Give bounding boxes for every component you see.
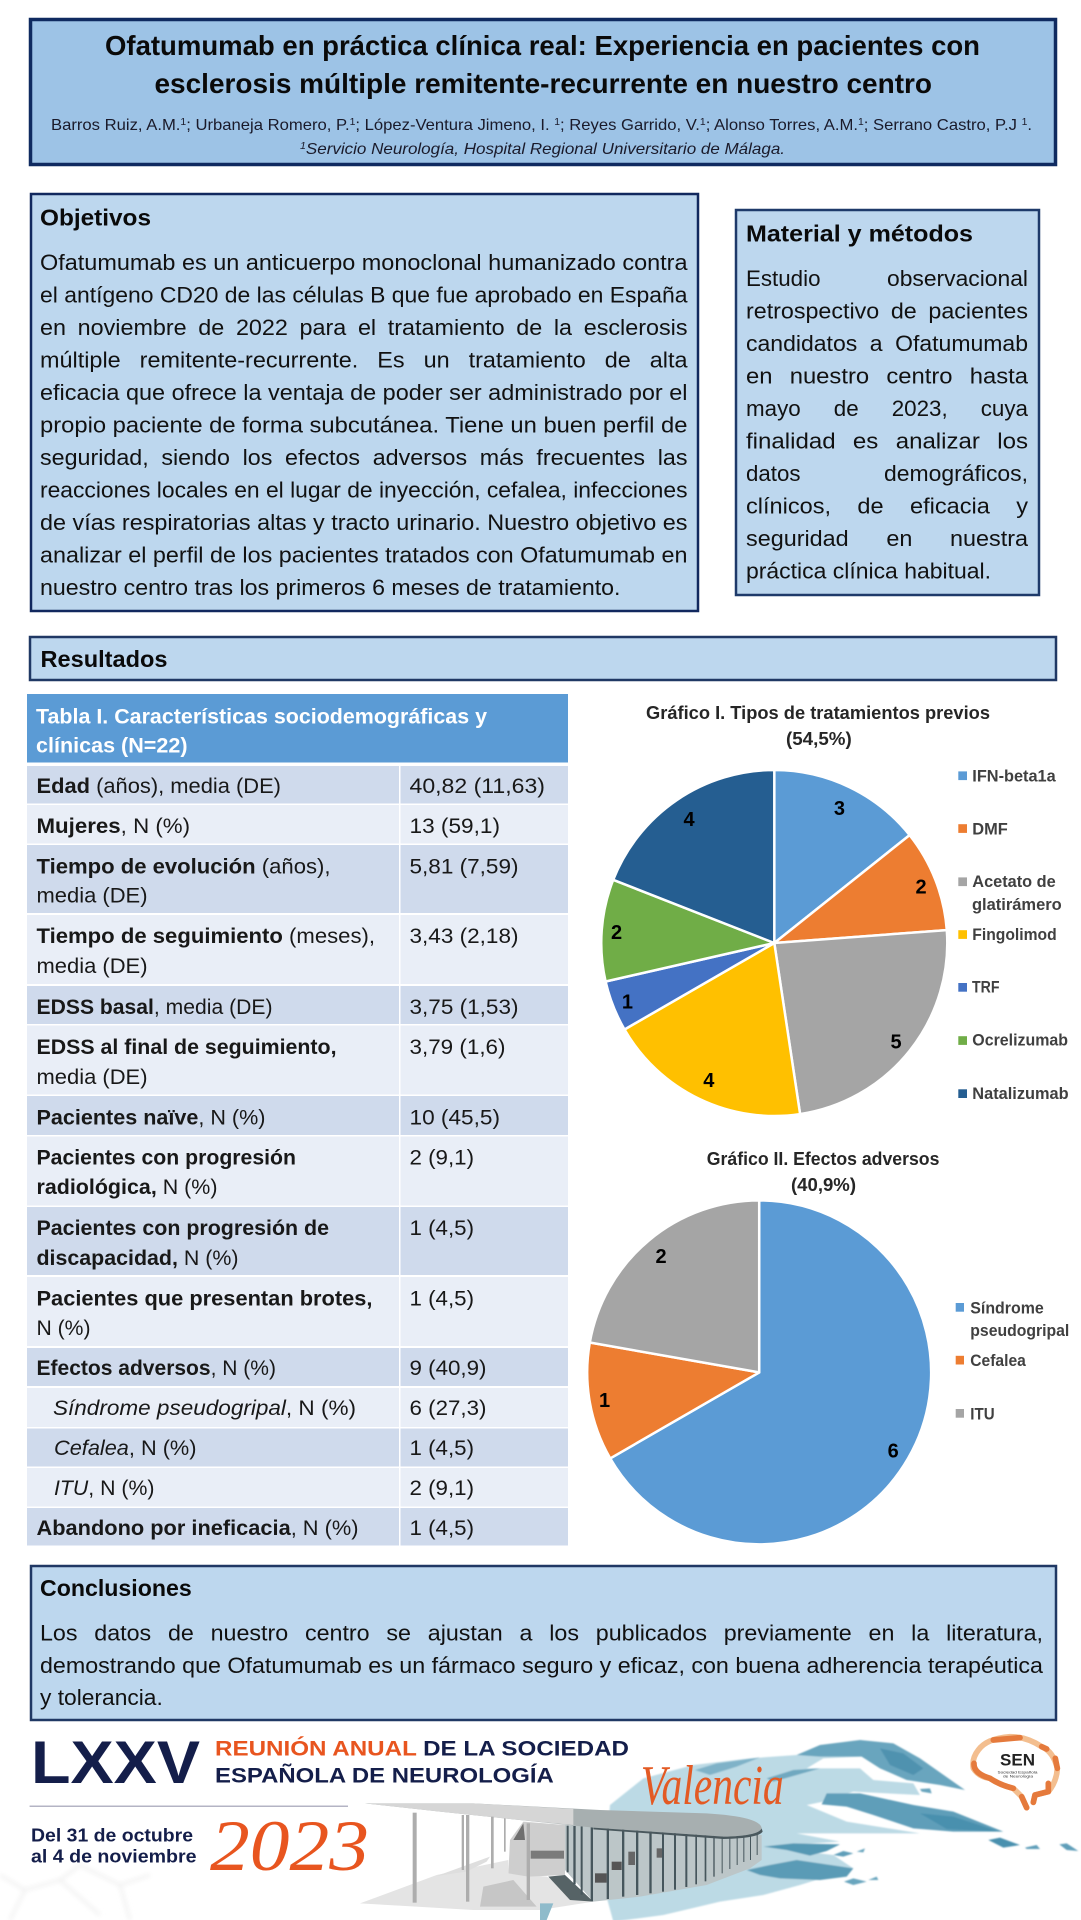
authors: 1 <box>350 117 356 128</box>
objetivos body text <box>40 250 688 600</box>
event dates: al 4 de noviembre <box>31 1847 196 1867</box>
table row labels: Pacientes que presentan brotes, <box>36 1286 372 1310</box>
table row labels: Efectos adversos, N (%) <box>36 1356 276 1380</box>
table row labels: N (%) <box>36 1316 90 1340</box>
pie value labels: 2 <box>655 1246 667 1268</box>
illustration: congress building <box>360 1803 763 1920</box>
logo: SEN <box>973 1737 1057 1808</box>
pie value labels: 2 <box>611 922 622 944</box>
table row values: 3,43 (2,18) <box>410 924 518 948</box>
material y métodos body text: clínicos, de eficacia y <box>746 494 1029 518</box>
legend <box>958 767 1069 1103</box>
chart title: (54,5%) <box>786 728 852 749</box>
legend: Cefalea <box>970 1351 1026 1370</box>
logo: SEN: de Neurología <box>1003 1773 1034 1778</box>
conclusiones body text: demostrando que Ofatumumab es un fármaco seguro y eficaz, con buena adherencia terapéutica <box>40 1653 1043 1678</box>
title: esclerosis múltiple remitente-recurrente en nuestro centro <box>154 68 932 99</box>
legend: IFN-beta1a <box>972 767 1056 786</box>
table row labels: ITU, N (%) <box>54 1476 154 1500</box>
objetivos body text: reacciones locales en el lugar de inyección, cefalea, infecciones <box>40 478 687 502</box>
event dates: Del 31 de octubre <box>31 1826 193 1846</box>
table row labels: media (DE) <box>36 1065 148 1089</box>
event dates <box>31 1826 196 1867</box>
legend: Natalizumab <box>972 1084 1069 1103</box>
table row values: 1 (4,5) <box>410 1516 474 1540</box>
table row values: 1 (4,5) <box>410 1436 474 1460</box>
table row values: 40,82 (11,63) <box>410 774 545 798</box>
objetivos body text: de vías respiratorias altas y tracto urinario. Nuestro objetivo es <box>40 510 688 535</box>
material y métodos body text: candidatos a Ofatumumab <box>746 331 1028 356</box>
table row values: 9 (40,9) <box>410 1356 486 1380</box>
table row labels: EDSS al final de seguimiento, <box>36 1035 336 1059</box>
panel: objetivos <box>31 194 698 611</box>
material y métodos body text: práctica clínica habitual. <box>746 558 991 584</box>
legend <box>956 1298 1069 1423</box>
conclusiones body text: y tolerancia. <box>40 1685 163 1710</box>
event name: ESPAÑOLA DE NEUROLOGÍA <box>215 1763 554 1788</box>
authors: ; Serrano Castro, P.J <box>864 117 1022 134</box>
table header: clínicas (N=22) <box>36 734 188 758</box>
authors: 1 <box>700 117 706 128</box>
title <box>105 30 980 99</box>
objetivos body text: analizar el perfil de los pacientes tratados con Ofatumumab en <box>40 542 688 568</box>
objetivos body text: múltiple remitente-recurrente. Es un tratamiento de alta <box>40 348 688 372</box>
table row labels: Cefalea, N (%) <box>54 1436 196 1460</box>
table row values: 3,75 (1,53) <box>410 995 518 1019</box>
title: Ofatumumab en práctica clínica real: Experiencia en pacientes con <box>105 30 980 61</box>
panel: title header <box>30 20 1056 164</box>
chart title <box>707 1148 939 1195</box>
objetivos body text: seguridad, siendo los efectos adversos más frecuentes las <box>40 445 687 470</box>
authors: ; Alonso Torres, A.M. <box>706 117 858 134</box>
authors: 1 <box>1022 117 1028 128</box>
authors: 1 <box>858 117 864 128</box>
legend: Fingolimod <box>972 925 1057 944</box>
table row labels: media (DE) <box>36 954 148 978</box>
pie value labels: 6 <box>888 1441 899 1463</box>
table: características sociodemográficas <box>27 694 568 1546</box>
conclusiones body text <box>40 1620 1043 1710</box>
watermark: faint branches <box>0 1865 150 1920</box>
objetivos body text: el antígeno CD20 de las células B que fue aprobado en España <box>40 282 688 308</box>
legend: Ocrelizumab <box>972 1030 1068 1050</box>
table row labels: Tiempo de seguimiento (meses), <box>36 924 375 948</box>
table row values: 1 (4,5) <box>410 1286 474 1310</box>
table header: Tabla I. Características sociodemográficas y <box>36 704 487 728</box>
material y métodos body text: Estudio <box>746 266 820 291</box>
table row values: 5,81 (7,59) <box>410 854 518 878</box>
material y métodos body text: mayo de 2023, cuya <box>746 396 1028 421</box>
table rows background <box>27 766 568 1546</box>
objetivos body text: propio paciente de forma subcutánea. Tiene un buen perfil de <box>40 412 688 438</box>
authors: 1 <box>180 117 187 128</box>
table row labels: Mujeres, N (%) <box>36 814 190 838</box>
table row labels: Pacientes naïve, N (%) <box>36 1106 266 1130</box>
legend: Síndrome <box>970 1298 1044 1317</box>
chart title: Gráfico I. Tipos de tratamientos previos <box>646 702 990 723</box>
material y métodos body text: datos <box>746 461 800 486</box>
table row labels: Tiempo de evolución (años), <box>36 854 330 878</box>
legend: glatirámero <box>972 895 1062 914</box>
event number: LXXV <box>31 1729 200 1796</box>
table row values: 2 (9,1) <box>410 1146 474 1170</box>
table row values: 3,79 (1,6) <box>410 1035 506 1059</box>
affiliation: Servicio Neurología, Hospital Regional Universitario de Málaga. <box>306 141 785 158</box>
objetivos body text: eficacia que ofrece la ventaja de poder ser administrado por el <box>40 380 688 405</box>
heading: conclusiones: Conclusiones <box>40 1575 192 1601</box>
table row labels: Pacientes con progresión de <box>36 1216 329 1240</box>
banner: congress footer <box>0 1729 1078 1920</box>
authors: ; Reyes Garrido, V. <box>560 117 700 134</box>
legend: TRF <box>972 978 1000 997</box>
authors: ; López-Ventura Jimeno, I. <box>355 117 554 134</box>
logo: SEN: SEN <box>1000 1751 1035 1770</box>
table row labels: Edad (años), media (DE) <box>36 774 281 798</box>
pie value labels <box>611 798 927 1092</box>
chart title: (40,9%) <box>791 1174 856 1195</box>
chart: gráfico II efectos adversos <box>587 1148 1069 1544</box>
authors: . <box>1027 117 1032 134</box>
table row labels: Abandono por ineficacia, N (%) <box>36 1516 358 1540</box>
authors: Barros Ruiz, A.M. <box>51 117 175 134</box>
legend: Acetato de <box>972 872 1056 891</box>
table row labels: EDSS basal, media (DE) <box>36 995 272 1019</box>
objetivos body text: nuestro centro tras los primeros 6 meses de tratamiento. <box>40 575 620 600</box>
pie value labels: 4 <box>683 809 695 831</box>
objetivos body text: Ofatumumab es un anticuerpo monoclonal humanizado contra <box>40 250 688 275</box>
chart: gráfico I tipos de tratamientos previos <box>601 702 1069 1116</box>
pie value labels: 1 <box>599 1390 610 1412</box>
legend: DMF <box>972 819 1008 838</box>
city: Valencia <box>641 1755 784 1817</box>
table row labels <box>36 774 375 1540</box>
table row values: 10 (45,5) <box>410 1106 500 1130</box>
pie value labels <box>599 1246 899 1463</box>
pie value labels: 4 <box>703 1070 715 1092</box>
watercolour wash <box>603 1740 1078 1920</box>
conclusiones body text: Los datos de nuestro centro se ajustan a los publicados previamente en la literatura, <box>40 1620 1043 1646</box>
table row labels: discapacidad, N (%) <box>36 1246 238 1270</box>
pie value labels: 1 <box>622 992 633 1014</box>
table row values: 13 (59,1) <box>410 814 500 838</box>
logo: SEN: Sociedad Española <box>998 1769 1038 1774</box>
pie value labels: 3 <box>834 798 845 820</box>
pie value labels: 2 <box>915 876 927 898</box>
table row values <box>410 774 545 1540</box>
material y métodos body text: retrospectivo de pacientes <box>746 298 1028 324</box>
panel: resultados heading bar <box>30 637 1056 680</box>
authors: 1 <box>554 117 560 128</box>
legend: ITU <box>970 1404 995 1423</box>
affiliation: 1 <box>300 141 306 152</box>
material y métodos body text: finalidad es analizar los <box>746 428 1028 454</box>
objetivos body text: en noviembre de 2022 para el tratamiento de la esclerosis <box>40 315 688 340</box>
panel: material y métodos <box>736 210 1039 595</box>
material y métodos body text: observacional <box>887 266 1028 291</box>
material y métodos body text: demográficos, <box>884 461 1028 486</box>
table row values: 1 (4,5) <box>410 1216 474 1240</box>
material y métodos body text: en nuestro centro hasta <box>746 364 1029 388</box>
chart title <box>646 702 990 749</box>
year: 2023 <box>210 1806 369 1886</box>
legend: pseudogripal <box>970 1321 1069 1340</box>
chart title: Gráfico II. Efectos adversos <box>707 1148 939 1169</box>
table row values: 6 (27,3) <box>410 1396 486 1420</box>
table row labels: media (DE) <box>36 884 148 908</box>
pie value labels: 5 <box>890 1032 902 1054</box>
pie slices <box>601 770 947 1116</box>
table header <box>27 694 568 762</box>
material y métodos body text: seguridad en nuestra <box>746 526 1028 551</box>
pie slices <box>587 1200 931 1544</box>
table row labels: Síndrome pseudogripal , N (%) <box>53 1396 356 1420</box>
table row values: 2 (9,1) <box>410 1476 474 1500</box>
event name: REUNIÓN ANUAL DE LA SOCIEDAD <box>215 1736 629 1761</box>
event name <box>215 1736 629 1788</box>
authors: ; Urbaneja Romero, P. <box>186 117 350 134</box>
table row labels: Pacientes con progresión <box>36 1146 296 1170</box>
table row labels: radiológica, N (%) <box>36 1175 218 1199</box>
heading: resultados: Resultados <box>40 646 168 672</box>
heading: material y métodos: Material y métodos <box>746 220 973 246</box>
panel: conclusiones <box>31 1566 1056 1720</box>
heading: objetivos: Objetivos <box>40 204 151 230</box>
material y métodos body text <box>746 266 1029 584</box>
